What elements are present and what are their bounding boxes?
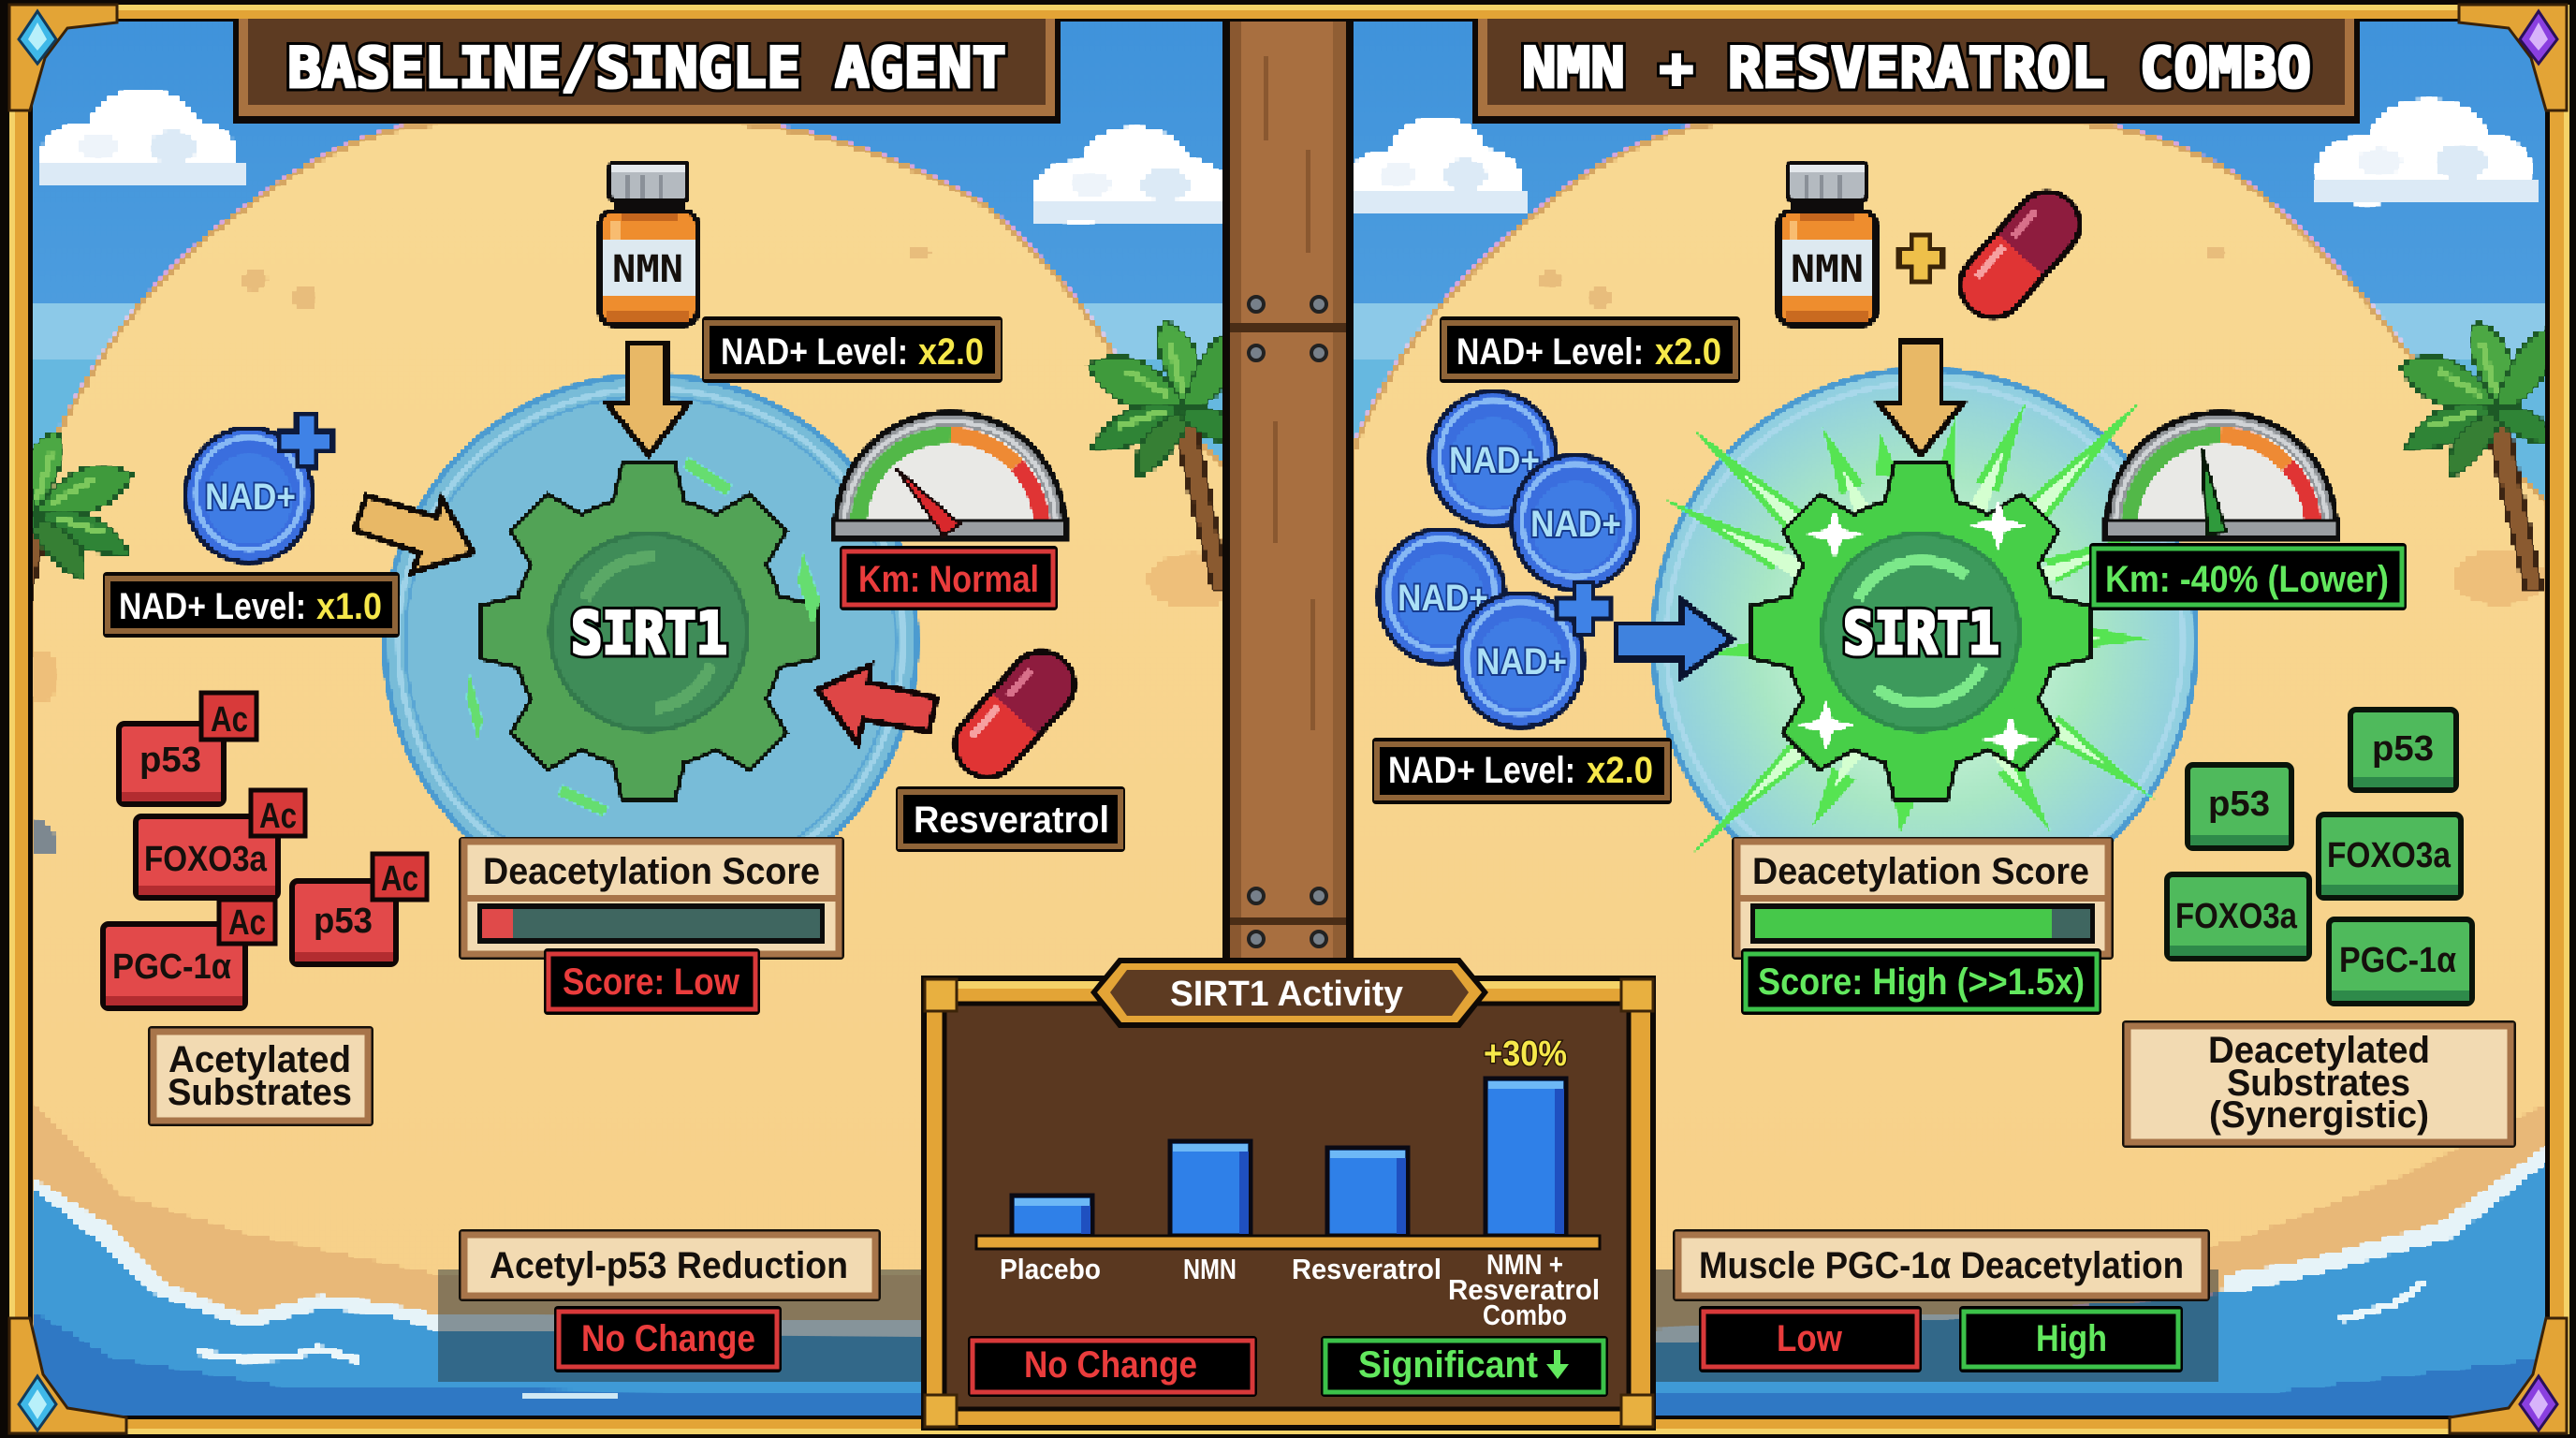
bar: NMN	[1170, 1141, 1251, 1236]
activated SIRT1 bubble, bursts and gear	[1653, 370, 2196, 913]
icon: NMN bottle	[597, 160, 700, 328]
axis labels: Placebo	[1000, 1253, 1101, 1285]
title plaque: combo: NMN + RESVERATROL COMBO	[1522, 36, 2311, 101]
gauge: Km lowered	[2105, 413, 2337, 538]
center wooden post	[1222, 19, 1354, 974]
label: Km lower: Km: -40% (Lower)	[2105, 559, 2389, 600]
axis labels: NMN	[1183, 1253, 1237, 1285]
panel: deacetylation score high	[1732, 837, 2114, 960]
corner ornament: top left cyan gem	[9, 5, 117, 110]
label: resveratrol: Resveratrol	[914, 800, 1109, 841]
title plaque: combo	[1472, 19, 2360, 124]
SIRT1 bubble and gear: SIRT1	[571, 599, 727, 668]
bar: placebo	[1012, 1196, 1092, 1236]
panel: deacetylation score low: Deacetylation Score	[483, 851, 820, 892]
label: score low: Score: Low	[563, 961, 740, 1003]
label: NAD+ x1.0: NAD+ Level:	[119, 586, 306, 627]
axis labels: NMN +	[1486, 1248, 1563, 1281]
arrow: combo to gear	[1880, 342, 1962, 454]
title plaque: baseline	[233, 19, 1061, 124]
label: deacetylated substrates synergistic: (Synergistic)	[2209, 1094, 2429, 1136]
badge: high: High	[2036, 1318, 2107, 1359]
label: NAD+ x2.0 upper	[1440, 316, 1740, 383]
arrow: resveratrol inhibit	[818, 666, 936, 742]
icon: stack of NAD+ coins: NAD+	[1449, 440, 1540, 481]
activated SIRT1 bubble, bursts and gear: SIRT1	[1843, 599, 1999, 668]
deacetylated substrate blocks: FOXO3a	[2327, 836, 2452, 875]
icon: plus sign	[1899, 236, 1942, 281]
label: NAD+ x1.0: x1.0	[316, 586, 382, 627]
acetylated substrate blocks: p53	[139, 741, 201, 780]
badge: low: Low	[1777, 1318, 1843, 1359]
axis labels: Resveratrol	[1448, 1273, 1600, 1306]
label: NAD+ x2.0 lower: x2.0	[1587, 750, 1653, 791]
axis labels: Combo	[1483, 1299, 1567, 1331]
label: NAD+ x2.0 lower: NAD+ Level:	[1388, 750, 1575, 791]
label: Km normal	[840, 546, 1058, 610]
badge: chart no change	[968, 1336, 1257, 1397]
label: score high: Score: High (>>1.5x)	[1758, 961, 2085, 1003]
label: resveratrol	[896, 786, 1125, 852]
label: acetylated substrates	[148, 1026, 373, 1126]
label: NAD+ x2.0: NAD+ Level:	[721, 331, 908, 373]
gauge: Km normal	[834, 413, 1066, 538]
icon: NMN bottle: NMN	[612, 248, 683, 291]
badge: chart significant	[1321, 1336, 1608, 1397]
label: NAD+ x2.0 upper: NAD+ Level:	[1456, 331, 1644, 373]
axis labels: Resveratrol	[1292, 1253, 1442, 1285]
deacetylated substrate blocks: FOXO3a	[2175, 897, 2298, 936]
arrow: NMN to gear	[607, 344, 688, 454]
panel: deacetylation score high: Deacetylation Score	[1752, 851, 2089, 892]
label: NAD+ x1.0	[103, 572, 400, 638]
label: deacetylated substrates synergistic	[2122, 1020, 2516, 1148]
label: NAD+ x2.0 lower	[1372, 738, 1672, 804]
panel: deacetylation score low	[459, 837, 844, 960]
bar chart	[976, 1034, 1600, 1331]
bar: resveratrol	[1327, 1148, 1408, 1236]
label: acetyl-p53 reduction: Acetyl-p53 Reduction	[490, 1245, 848, 1286]
chart title tab	[1090, 958, 1488, 1028]
badge: chart no change: No Change	[1024, 1344, 1197, 1386]
acetylated substrate blocks: Ac	[211, 700, 248, 740]
corner ornament: bottom left cyan gem	[9, 1318, 126, 1433]
icon: stack of NAD+ coins	[1376, 389, 1641, 729]
acetylated substrate blocks: Ac	[381, 859, 418, 899]
title plaque: baseline: BASELINE/SINGLE AGENT	[287, 36, 1006, 101]
chart title tab: SIRT1 Activity	[1170, 975, 1403, 1014]
icon: NAD+ coin: NAD+	[205, 477, 296, 518]
label: acetylated substrates: Substrates	[168, 1072, 352, 1113]
bar: combo	[1486, 1078, 1566, 1236]
label: score low	[544, 948, 760, 1015]
label: Km lower	[2089, 543, 2407, 610]
label: NAD+ x2.0 upper: x2.0	[1655, 331, 1721, 373]
label: acetylated substrates: Acetylated	[168, 1039, 351, 1080]
label: score high	[1741, 948, 2101, 1015]
deacetylated substrate blocks	[2167, 710, 2472, 1004]
deacetylated substrate blocks: PGC-1α	[2339, 941, 2456, 980]
label: deacetylated substrates synergistic: Deacetylated	[2208, 1030, 2430, 1071]
deacetylated substrate blocks: p53	[2208, 785, 2270, 824]
corner ornament: bottom right purple gem	[2450, 1318, 2567, 1433]
arrow: NAD+ to gear	[355, 496, 473, 572]
label: muscle PGC-1a deacetylation	[1673, 1229, 2210, 1301]
icon: NAD+ coin	[183, 415, 332, 565]
badge: no change	[554, 1306, 782, 1372]
arrow: NAD+ stack to gear	[1617, 601, 1732, 676]
badge: low	[1699, 1306, 1922, 1372]
label: Km normal: Km: Normal	[858, 559, 1039, 600]
SIRT1 bubble and gear	[385, 375, 916, 907]
label: NAD+ x2.0	[702, 316, 1003, 383]
icon: NMN bottle combo	[1776, 160, 1879, 328]
badge: chart significant: Significant	[1358, 1344, 1538, 1386]
corner ornament: top right purple gem	[2459, 5, 2567, 110]
acetylated substrate blocks: PGC-1α	[112, 947, 231, 987]
axis labels	[1000, 1248, 1600, 1331]
icon: stack of NAD+ coins: NAD+	[1530, 504, 1621, 545]
icon: resveratrol capsule	[939, 636, 1090, 793]
icon: resveratrol capsule combo	[1944, 176, 2096, 333]
icon: stack of NAD+ coins: NAD+	[1476, 641, 1567, 682]
icon: stack of NAD+ coins: NAD+	[1398, 578, 1488, 619]
acetylated substrate blocks: Ac	[228, 903, 266, 943]
acetylated substrate blocks: Ac	[259, 797, 297, 836]
acetylated substrate blocks: FOXO3a	[144, 840, 268, 879]
badge: no change: No Change	[581, 1318, 755, 1359]
label: NAD+ x2.0: x2.0	[918, 331, 984, 373]
acetylated substrate blocks: p53	[314, 902, 373, 941]
label: muscle PGC-1a deacetylation: Muscle PGC-1α Deacetylation	[1699, 1245, 2184, 1286]
acetylated substrate blocks	[103, 693, 427, 1008]
panel: baseline single agent	[103, 19, 1125, 1372]
panel: NMN + resveratrol combo	[1372, 19, 2516, 1372]
label: +30%: +30%	[1484, 1034, 1567, 1074]
deacetylated substrate blocks: p53	[2372, 729, 2434, 769]
panel: SIRT1 activity chart	[921, 958, 1656, 1431]
badge: high	[1959, 1306, 2183, 1372]
label: acetyl-p53 reduction	[459, 1229, 881, 1301]
label: deacetylated substrates synergistic: Substrates	[2227, 1063, 2410, 1104]
icon: NMN bottle combo: NMN	[1791, 248, 1864, 291]
